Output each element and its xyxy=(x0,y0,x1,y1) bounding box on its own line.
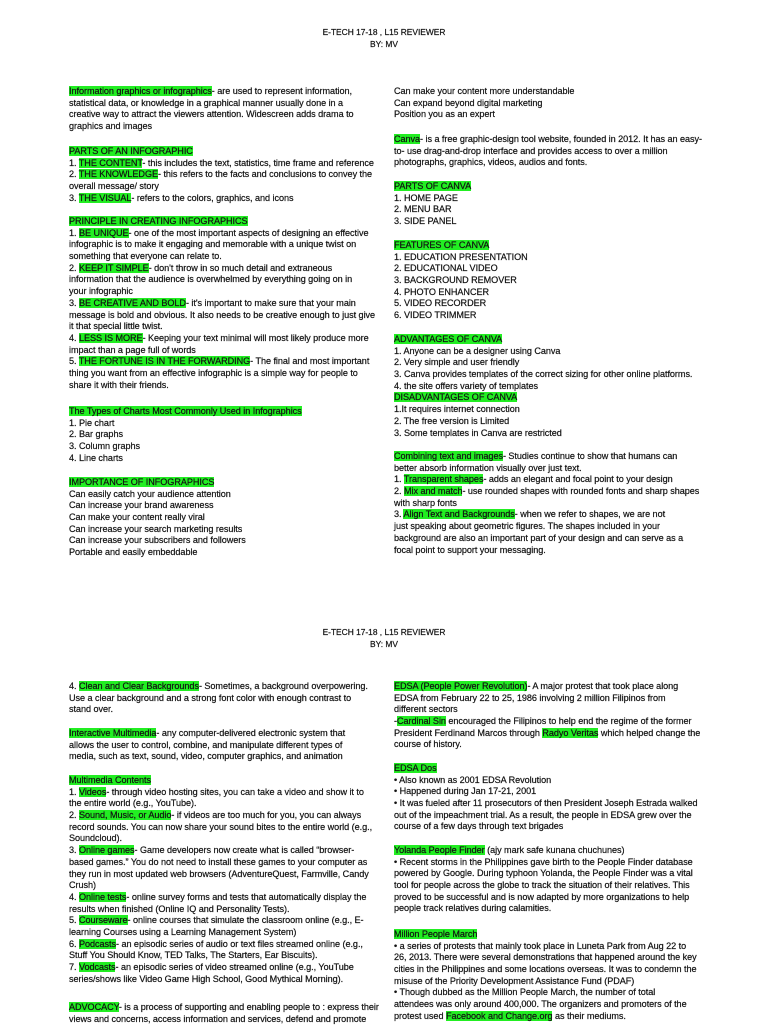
section: multimedia contents: 1. Videos- through video hosting sites, you can take a video and show it to xyxy=(69,787,364,797)
section: importance xyxy=(69,477,246,558)
section: combining text and images xyxy=(394,451,700,556)
section: combining text and images: 2. Mix and match- use rounded shapes with rounded fonts and sharp shapes xyxy=(394,486,699,496)
section: multimedia contents: Stuff You Should Know, TED Talks, The Starters, Ear Biscuits). xyxy=(69,950,317,960)
section: EDSA Dos: course of a few days through text brigades xyxy=(394,821,563,831)
section: importance: Can increase your search marketing results xyxy=(69,524,242,534)
section: features of canva: 5. VIDEO RECORDER xyxy=(394,298,486,308)
section: canva: photographs, graphics, videos, audios and fonts. xyxy=(394,157,587,167)
section: canva xyxy=(394,134,702,168)
section: advocacy: views and concerns, access information and services, defend and promote xyxy=(69,1014,366,1024)
section: combining text and images: 3. Align Text and Backgrounds- when we refer to shapes, we are not xyxy=(394,509,665,519)
section: EDSA: -Cardinal Sin encouraged the Filipinos to help end the regime of the former xyxy=(394,716,692,726)
section: advantages and disadvantages: DISADVANTAGES OF CANVA xyxy=(394,392,517,402)
section: Yolanda People Finder: • Recent storms in the Philippines gave birth to the People Finder database xyxy=(394,857,693,867)
section: combining text and images: with sharp fonts xyxy=(394,498,457,508)
section: EDSA: EDSA from February 22 to 25, 1986 involving 2 million Filipinos from xyxy=(394,693,666,703)
section: parts of an infographic: 1. THE CONTENT- this includes the text, statistics, time frame and reference xyxy=(69,158,374,168)
section: importance continued: Can make your content more understandable xyxy=(394,86,574,96)
section: importance: Can increase your subscribers and followers xyxy=(69,535,246,545)
header page 1 xyxy=(323,27,446,48)
section: principles: PRINCIPLE IN CREATING INFOGRAPHICS xyxy=(69,216,248,226)
section: interactive multimedia: allows the user to control, combine, and manipulate different types of xyxy=(69,740,342,750)
section: multimedia contents: they run in most updated web browsers (AdventureQuest, Farmville, Candy xyxy=(69,868,369,878)
section: types of charts: 2. Bar graphs xyxy=(69,429,123,439)
section: importance continued: Position you as an expert xyxy=(394,109,495,119)
section: Million People March: Million People March xyxy=(394,929,477,939)
section: advantages and disadvantages: 2. Very simple and user friendly xyxy=(394,357,519,367)
section: multimedia contents: 2. Sound, Music, or Audio- if videos are too much for you, you can always xyxy=(69,810,361,820)
section: clean backgrounds: 4. Clean and Clear Backgrounds- Sometimes, a background overpowering. xyxy=(69,681,368,691)
section: multimedia contents: 5. Courseware- online courses that simulate the classroom online (e.g., E- xyxy=(69,915,364,925)
section: advantages and disadvantages: 4. the site offers variety of templates xyxy=(394,381,538,391)
section: interactive multimedia: Interactive Multimedia- any computer-delivered electronic system that xyxy=(69,728,345,738)
section: EDSA Dos: EDSA Dos xyxy=(394,763,437,773)
section: multimedia contents: Crush) xyxy=(69,880,96,890)
section: canva: Canva- is a free graphic-design tool website, founded in 2012. It has an easy- xyxy=(394,134,702,144)
header page 2: E-TECH 17-18 , L15 REVIEWER xyxy=(323,627,445,637)
section: Million People March xyxy=(394,929,697,1022)
section: features of canva: FEATURES OF CANVA xyxy=(394,240,489,250)
section: canva: to- use drag-and-drop interface and provides access to over a million xyxy=(394,146,668,156)
section: advantages and disadvantages: 1. Anyone can be a designer using Canva xyxy=(394,346,560,356)
section: multimedia contents xyxy=(69,775,372,984)
section: multimedia contents: record sounds. You can now share your sound bites to the entire world (e.g., xyxy=(69,822,372,832)
section: features of canva: 4. PHOTO ENHANCER xyxy=(394,287,489,297)
section: parts of an infographic: PARTS OF AN INFOGRAPHIC xyxy=(69,146,193,156)
section: EDSA Dos: • Also known as 2001 EDSA Revolution xyxy=(394,775,551,785)
section: importance: Can easily catch your audience attention xyxy=(69,489,231,499)
section: principles: something that everyone can relate to. xyxy=(69,251,222,261)
section: combining text and images: focal point to support your messaging. xyxy=(394,544,546,554)
section: EDSA: President Ferdinand Marcos through Radyo Veritas which helped change the xyxy=(394,728,700,738)
section: multimedia contents: 7. Vodcasts- an episodic series of video streamed online (e.g., YouTube xyxy=(69,962,354,972)
section: Million People March: • a series of protests that mainly took place in Luneta Park from Aug 22 to xyxy=(394,941,686,951)
section: types of charts: 4. Line charts xyxy=(69,453,123,463)
section: principles xyxy=(68,216,375,390)
section: EDSA: different sectors xyxy=(394,704,458,714)
section: EDSA: course of history. xyxy=(394,739,462,749)
section: parts of canva xyxy=(394,181,472,226)
section: EDSA xyxy=(394,681,700,750)
header page 1: BY: MV xyxy=(370,38,398,48)
section: Million People March: misuse of the Priority Development Assistance Fund (PDAF) xyxy=(394,976,634,986)
section: EDSA: EDSA (People Power Revolution)- A major protest that took place along xyxy=(394,681,678,691)
header page 1: E-TECH 17-18 , L15 REVIEWER xyxy=(323,27,445,37)
section: types of charts: 1. Pie chart xyxy=(69,418,114,428)
section: Yolanda People Finder: proved to be successful and is now adapted by more organizations to help xyxy=(394,892,689,902)
section: Yolanda People Finder: people track relatives during calamities. xyxy=(394,903,551,913)
section: features of canva: 1. EDUCATION PRESENTATION xyxy=(394,252,528,262)
section: Yolanda People Finder xyxy=(394,845,693,914)
section: Yolanda People Finder: tool for people across the globe to track the situation of their relatives. This xyxy=(394,880,690,890)
section: Million People March: protest used Facebook and Change.org as their mediums. xyxy=(394,1011,626,1021)
section: Yolanda People Finder: Yolanda People Finder (ajy mark safe kunana chuchunes) xyxy=(394,845,625,855)
section: importance continued: Can expand beyond digital marketing xyxy=(394,98,542,108)
section: principles: 2. KEEP IT SIMPLE- don't throw in so much detail and extraneous xyxy=(69,263,332,273)
section: EDSA Dos: • Happened during Jan 17-21, 2001 xyxy=(394,786,536,796)
section: Million People March: 26, 2013. There were several demonstrations that happened around the key xyxy=(394,952,697,962)
section: advantages and disadvantages: 2. The free version is Limited xyxy=(394,416,509,426)
section: types of charts: The Types of Charts Most Commonly Used in Infographics xyxy=(69,406,302,416)
section: multimedia contents: results when finished (Online IQ and Personality Tests). xyxy=(69,904,289,914)
section: advantages and disadvantages xyxy=(394,334,692,438)
section: principles: 3. BE CREATIVE AND BOLD- it's important to make sure that your main xyxy=(69,298,356,308)
section: advantages and disadvantages: ADVANTAGES OF CANVA xyxy=(394,334,502,344)
section: parts of canva: 2. MENU BAR xyxy=(394,204,452,214)
section: features of canva: 3. BACKGROUND REMOVER xyxy=(394,275,517,285)
section: information graphics definition: graphics and images xyxy=(69,121,152,131)
section: principles: message is bold and obvious. It also needs to be creative enough to just give xyxy=(69,310,375,320)
section: EDSA Dos xyxy=(394,763,698,832)
section: interactive multimedia xyxy=(69,728,346,762)
section: combining text and images: just speaking about geometric figures. The shapes included in your xyxy=(394,521,660,531)
section: multimedia contents: 3. Online games- Game developers now create what is called “browser- xyxy=(69,845,354,855)
section: Million People March: attendees was only around 400,000. The organizers and promoters of the xyxy=(394,999,687,1009)
section: advantages and disadvantages: 3. Canva provides templates of the correct sizing for other online platforms. xyxy=(394,369,692,379)
section: parts of an infographic: 3. THE VISUAL- refers to the colors, graphics, and icons xyxy=(69,193,293,203)
section: information graphics definition: Information graphics or infographics- are used to represent information, xyxy=(69,86,352,96)
section: features of canva xyxy=(394,240,528,320)
section: principles: information that the audience is overwhelmed by everything going on in xyxy=(69,274,352,284)
section: multimedia contents: the entire world (e.g., YouTube). xyxy=(69,798,196,808)
section: EDSA Dos: out of the impeachment trial. As a result, the people in EDSA grew over the xyxy=(394,810,692,820)
section: Million People March: • Though dubbed as the Million People March, the number of total xyxy=(394,987,655,997)
section: Million People March: cities in the Philippines and some locations overseas. It was to condemn the xyxy=(394,964,697,974)
section: clean backgrounds xyxy=(69,681,368,714)
section: combining text and images: 1. Transparent shapes- adds an elegant and focal point to your design xyxy=(394,474,673,484)
section: multimedia contents: based games.” You do not need to install these games to your computer as xyxy=(69,857,367,867)
section: combining text and images: Combining text and images- Studies continue to show that humans can xyxy=(394,451,677,461)
section: clean backgrounds: Use a clear background and a strong font color with enough contrast to xyxy=(69,693,351,703)
section: information graphics definition: statistical data, or knowledge in a graphical manner usually done in a xyxy=(69,98,343,108)
header page 2 xyxy=(323,627,446,648)
section: multimedia contents: learning Courses using a Learning Management System) xyxy=(69,927,296,937)
section: parts of an infographic: 2. THE KNOWLEDGE- this refers to the facts and conclusions to convey the xyxy=(69,169,372,179)
section: parts of canva: PARTS OF CANVA xyxy=(394,181,471,191)
section: parts of canva: 1. HOME PAGE xyxy=(394,193,458,203)
section: multimedia contents: series/shows like Video Game High School, Good Mythical Morning). xyxy=(69,974,343,984)
section: information graphics definition xyxy=(69,86,354,132)
section: interactive multimedia: media, such as text, sound, video, computer graphics, and animation xyxy=(69,751,343,761)
section: combining text and images: background are also an important part of your design and can serve as a xyxy=(394,533,683,543)
section: principles: share it with their friends. xyxy=(69,380,169,390)
section: importance: Can increase your brand awareness xyxy=(69,500,213,510)
section: principles: your infographic xyxy=(69,286,133,296)
section: EDSA Dos: • It was fueled after 11 prosecutors of then President Joseph Estrada walked xyxy=(394,798,698,808)
section: clean backgrounds: stand over. xyxy=(69,704,113,714)
section: importance: Portable and easily embeddable xyxy=(69,547,197,557)
section: types of charts xyxy=(69,406,302,463)
section: combining text and images: better absorb information visually over just text. xyxy=(394,463,582,473)
section: advantages and disadvantages: 1.It requires internet connection xyxy=(394,404,520,414)
section: Yolanda People Finder: powered by Google. During typhoon Yolanda, the People Finder was a vital xyxy=(394,868,693,878)
section: principles: infographic is to make it engaging and memorable with a unique twist on xyxy=(69,239,356,249)
section: advocacy: ADVOCACY- is a process of supporting and enabling people to : express their xyxy=(69,1002,379,1012)
section: types of charts: 3. Column graphs xyxy=(69,441,140,451)
section: principles: 5. THE FORTUNE IS IN THE FORWARDING- The final and most important xyxy=(69,356,369,366)
section: multimedia contents: Multimedia Contents xyxy=(69,775,151,785)
section: principles: it that special little twist. xyxy=(69,321,163,331)
header page 2: BY: MV xyxy=(370,638,398,648)
section: multimedia contents: Soundcloud). xyxy=(69,833,122,843)
section: parts of canva: 3. SIDE PANEL xyxy=(394,216,456,226)
section: information graphics definition: creative way to attract the viewers attention. Widescreen adds drama to xyxy=(69,109,354,119)
section: principles: impact than a page full of words xyxy=(69,345,196,355)
section: features of canva: 6. VIDEO TRIMMER xyxy=(394,310,476,320)
section: principles: 1. BE UNIQUE- one of the most important aspects of designing an effective xyxy=(69,228,368,238)
section: advocacy xyxy=(68,1002,379,1024)
section: importance continued xyxy=(394,86,574,120)
section: parts of an infographic: overall message/ story xyxy=(69,181,159,191)
section: multimedia contents: 6. Podcasts- an episodic series of audio or text files streamed online (e.g., xyxy=(69,939,363,949)
section: features of canva: 2. EDUCATIONAL VIDEO xyxy=(394,263,498,273)
section: advantages and disadvantages: 3. Some templates in Canva are restricted xyxy=(394,428,562,438)
section: principles: 4. LESS IS MORE- Keeping your text minimal will most likely produce more xyxy=(69,333,369,343)
section: importance: Can make your content really viral xyxy=(69,512,205,522)
section: importance: IMPORTANCE OF INFOGRAPHICS xyxy=(69,477,214,487)
section: parts of an infographic xyxy=(69,146,374,204)
section: multimedia contents: 4. Online tests- online survey forms and tests that automatically display the xyxy=(69,892,366,902)
section: principles: thing you want from an effective infographic is a simple way for people to xyxy=(69,368,358,378)
